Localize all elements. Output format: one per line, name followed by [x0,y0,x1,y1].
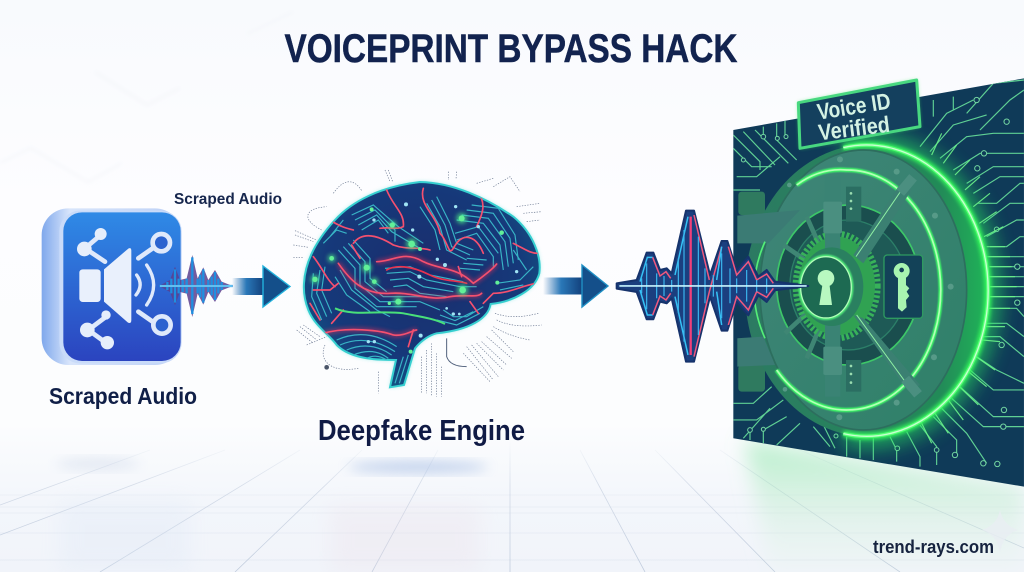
wheel spokes [783,217,820,358]
wall [733,78,1024,487]
arrow 1 [232,266,290,307]
small waveform [159,255,233,317]
door neon ring [777,170,941,410]
vertical bar [823,177,861,397]
big waveform [617,211,808,362]
icon: speaker [79,248,131,323]
neon rays [922,133,1017,443]
diagonal bars [853,182,920,392]
label: scraped audio small: Scraped Audio [174,191,282,208]
brain body [304,182,540,387]
left bracket [737,210,800,367]
circuit traces [733,80,1024,467]
glowing nodes [311,213,468,307]
door rivets [783,156,954,420]
arrow 2 [543,265,608,307]
label: deepfake engine: Deepfake Engine [318,415,525,447]
circuit traces [312,197,533,383]
icon: keyhole [818,270,834,305]
icon: sound waves [136,265,154,305]
icon: key panel [884,255,923,318]
hinge cylinders [738,192,765,392]
panel: circuit wall with vault [617,78,1024,487]
vault door disc [760,150,967,430]
label: scraped audio large: Scraped Audio [49,383,197,409]
brain decorative data specks [293,170,542,397]
icon: sparkle watermark [982,510,1018,552]
icon: audio app tile [42,208,182,365]
brain illustration [293,170,542,397]
neon glow [843,145,988,436]
green floor reflection [745,440,1024,572]
pink sulci glow [323,256,497,335]
badge: voice id verified [798,80,920,148]
floor shadows [56,458,488,572]
hub [800,247,863,326]
title: VOICEPRINT BYPASS HACK [284,27,738,71]
green trace [335,308,445,324]
icon: network nodes [85,235,155,343]
badge text line 2: Verified [817,111,891,145]
badge text: Voice ID [815,87,892,125]
gear [796,234,877,338]
floor grid [0,440,1024,572]
vault outer rim [745,145,988,436]
watermark url: trend-rays.com [873,537,994,557]
pink sulci [310,188,538,347]
inner dark chamber [777,205,920,365]
brain glow [304,182,540,387]
